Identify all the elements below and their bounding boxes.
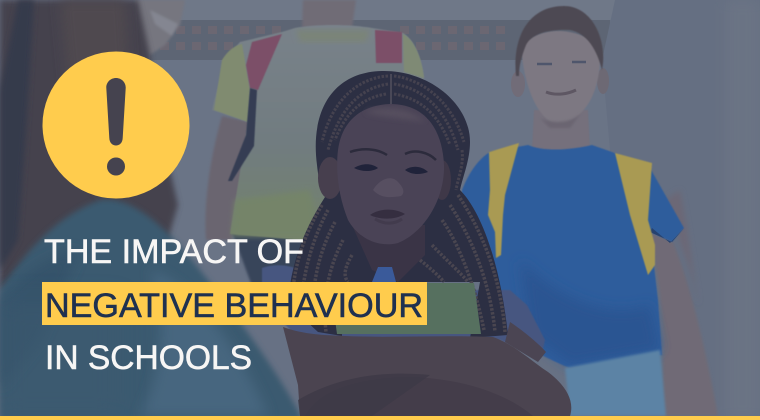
highlight bar behind title line 2 — [42, 282, 427, 325]
girl's arms — [283, 327, 571, 416]
nose and mouth — [373, 178, 403, 197]
hair mass — [288, 71, 508, 338]
dark trousers — [232, 232, 305, 286]
adult at left edge, face and glasses — [135, 0, 185, 55]
girl's neck — [352, 225, 425, 282]
boy's yellow straps — [488, 143, 519, 258]
parting line — [390, 74, 392, 104]
boy's eyes and smile — [537, 62, 586, 64]
title line 1: THE IMPACT OF — [44, 233, 304, 271]
green book — [330, 283, 481, 334]
boy's blue shirt — [462, 145, 684, 368]
boy's neck — [532, 110, 590, 150]
girl in foreground — [262, 71, 571, 416]
boy's shorts — [565, 350, 666, 416]
collar — [372, 267, 396, 282]
brows and eyes — [350, 149, 436, 160]
student's neck — [302, 0, 356, 28]
title line 2: NEGATIVE BEHAVIOUR — [45, 287, 423, 325]
red backpack straps — [246, 34, 282, 90]
lower arm — [305, 377, 533, 416]
boy's ears — [511, 71, 525, 97]
face — [337, 104, 444, 244]
student's arm — [205, 116, 250, 240]
black strap — [228, 88, 257, 181]
title line 3: IN SCHOOLS — [45, 339, 252, 377]
back student in yellow shirt — [205, 0, 424, 286]
right boy — [462, 6, 718, 416]
long braids — [292, 195, 505, 332]
bottom yellow strip — [0, 416, 760, 420]
girl's sleeves — [262, 265, 545, 358]
ears — [318, 157, 342, 199]
boy's face — [521, 31, 600, 125]
braids on the head — [322, 76, 464, 190]
boy's arm — [650, 232, 718, 416]
left foreground figure — [0, 0, 303, 420]
boy's hair — [515, 6, 603, 76]
icon: warning exclamation circle — [42, 52, 190, 198]
yellow shirt — [212, 25, 424, 240]
